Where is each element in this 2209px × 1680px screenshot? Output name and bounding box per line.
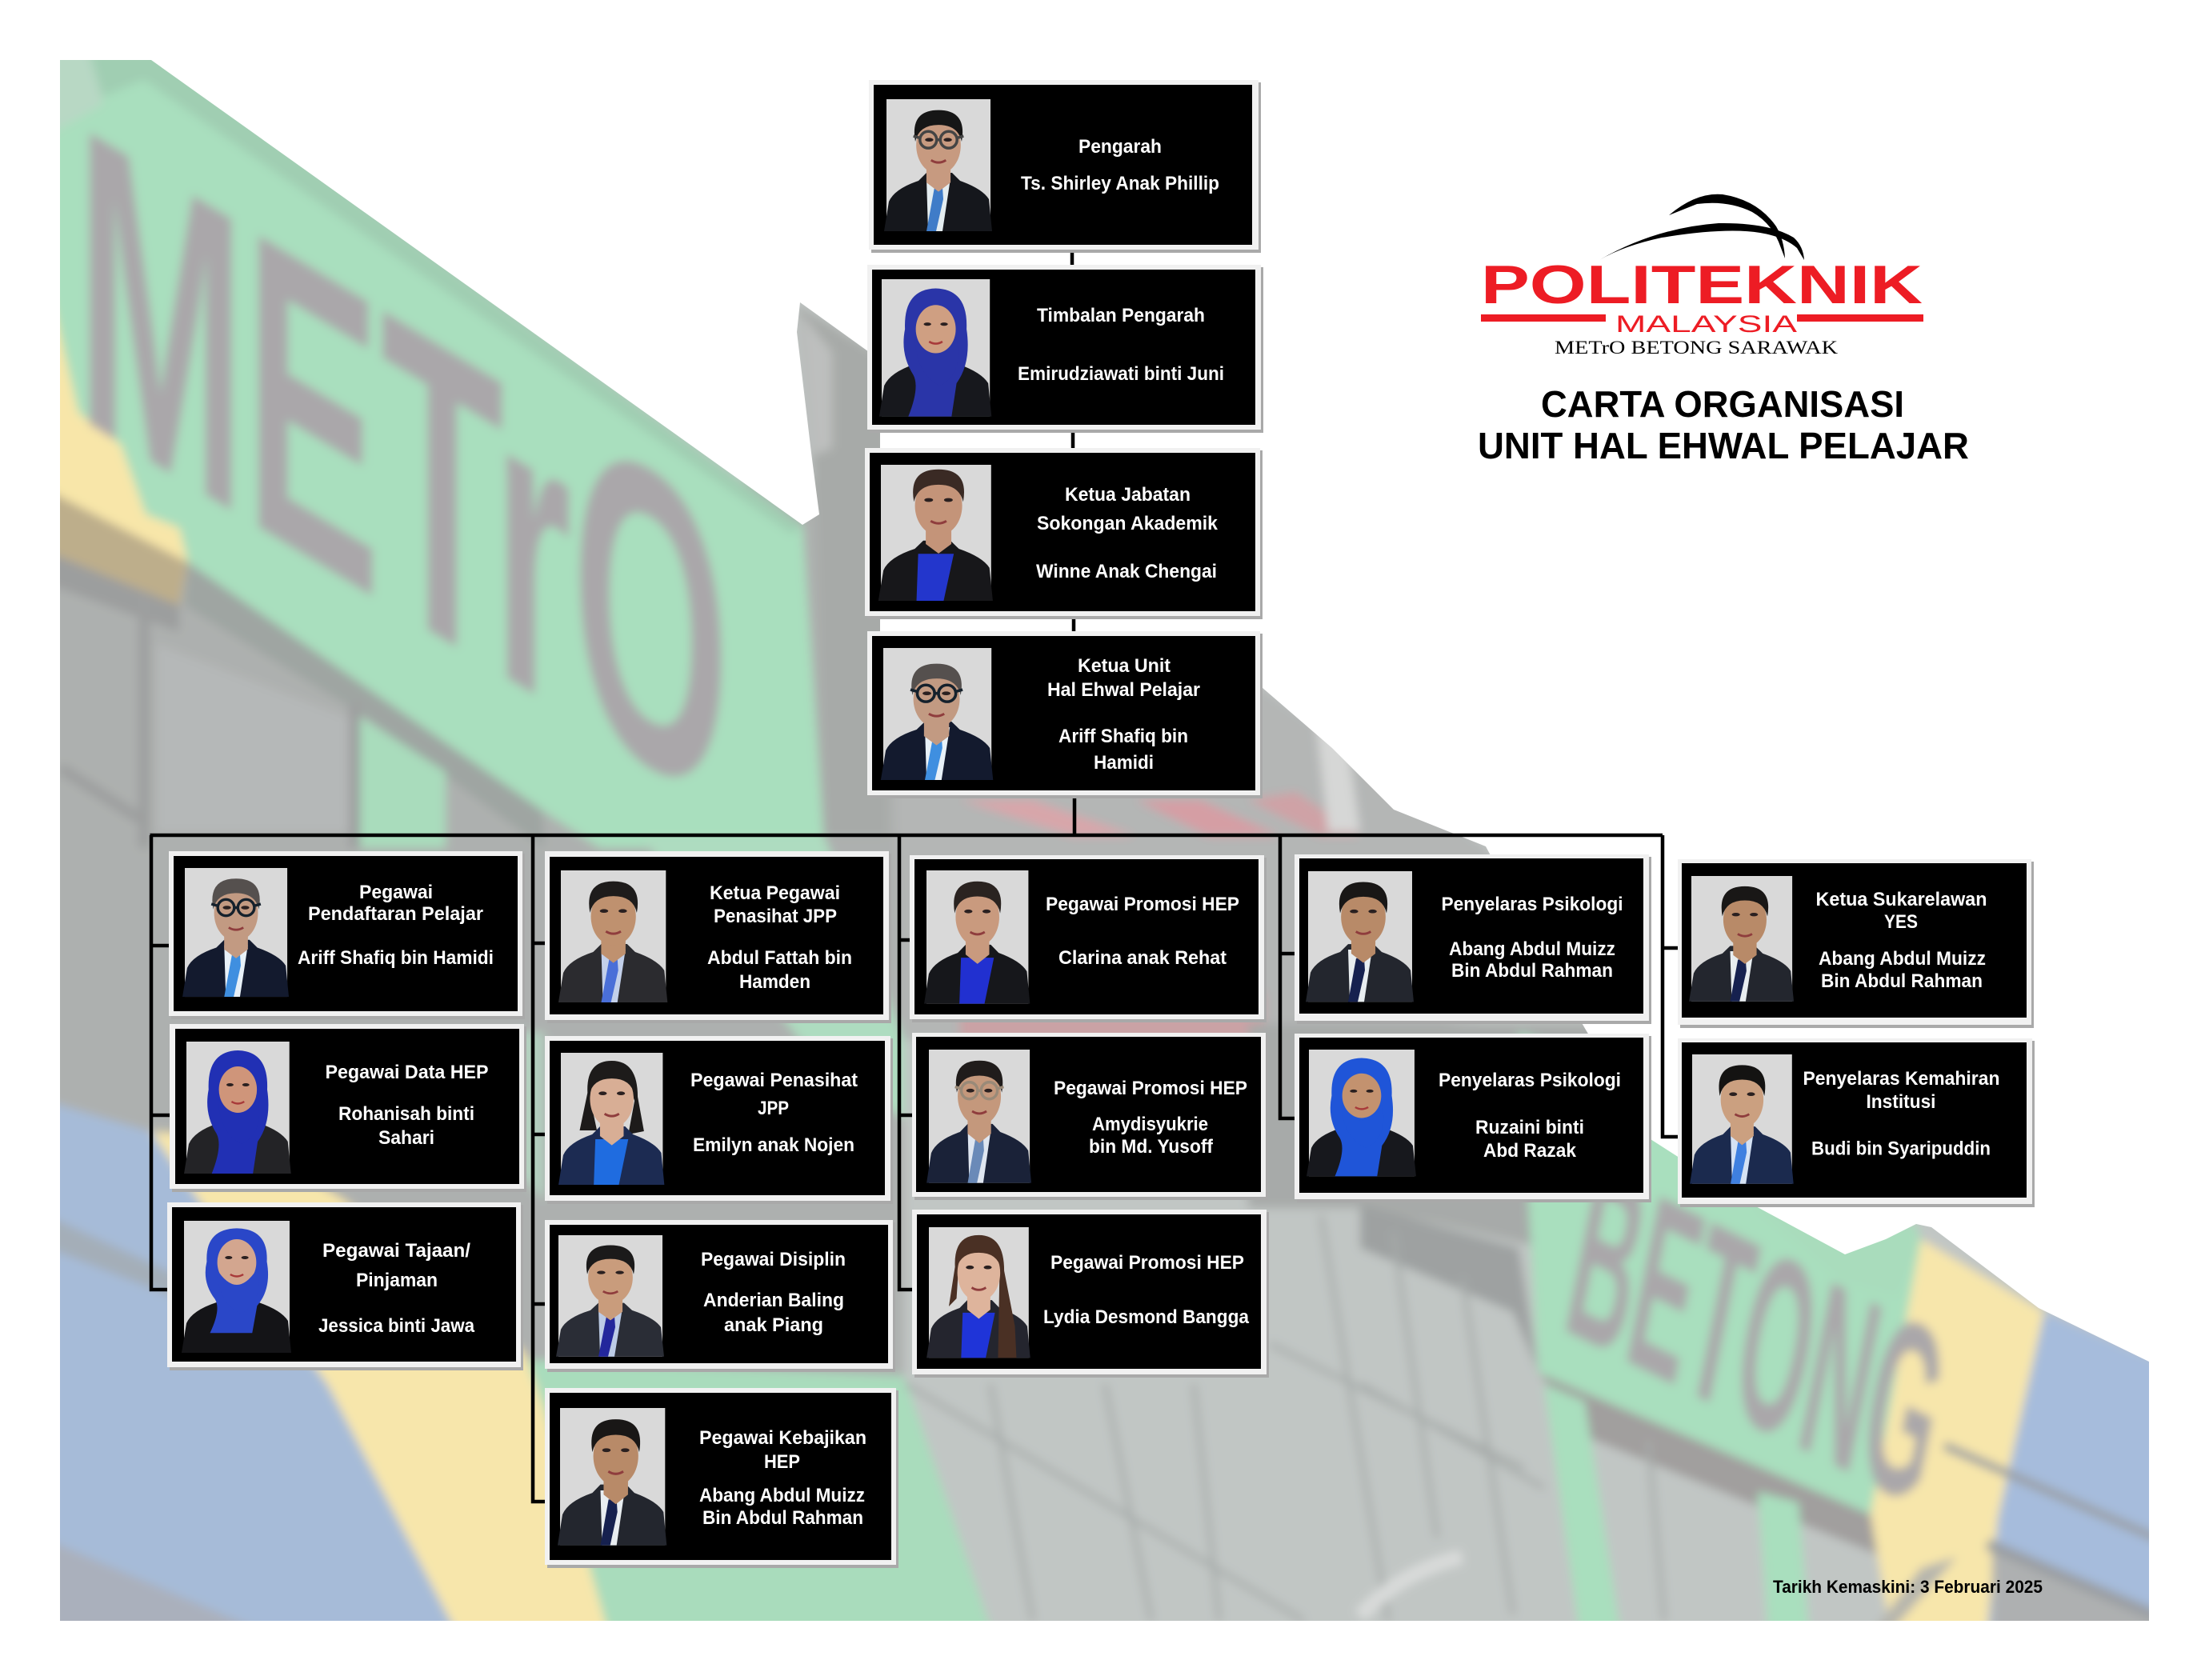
card: Pengarah (869, 80, 1261, 253)
text: Ketua Unit (1078, 655, 1171, 677)
card: Pegawai Kebajikan HEP (545, 1388, 898, 1568)
text: Ts. Shirley Anak Phillip (1021, 173, 1219, 194)
portrait: Ariff (182, 868, 289, 997)
title (1478, 383, 1969, 466)
text (1816, 889, 1987, 992)
text (1043, 1252, 1250, 1328)
logo bars (1481, 314, 1923, 322)
text (1803, 1068, 2000, 1160)
text: Sokongan Akademik (1037, 513, 1219, 534)
portrait: Abang Abdul Muizz (1689, 876, 1794, 1002)
portrait: Clarina (924, 870, 1030, 1004)
text: Jessica binti Jawa (318, 1315, 475, 1337)
text: Pegawai Promosi HEP (1054, 1078, 1247, 1099)
card: Timbalan Pengarah (867, 265, 1263, 433)
text: Emirudziawati binti Juni (1018, 363, 1224, 385)
text (1054, 1078, 1247, 1158)
text: Pegawai (359, 882, 433, 903)
text (1439, 1070, 1621, 1162)
portrait: Ruzaini (1307, 1050, 1416, 1176)
card: Penyelaras Kemahiran Institusi (1678, 1038, 2035, 1207)
text (1036, 484, 1219, 582)
background photo: building facade: METrO (76, 33, 730, 903)
card: Ketua Jabatan (865, 448, 1263, 619)
text: Ketua Pegawai (710, 882, 840, 904)
text (1046, 894, 1239, 969)
text: Ketua Jabatan (1065, 484, 1191, 506)
text: Timbalan Pengarah (1037, 305, 1205, 326)
card: Pegawai Promosi HEP (Lydia) (912, 1210, 1269, 1378)
text: Winne Anak Chengai (1036, 561, 1217, 582)
update date: Tarikh Kemaskini: 3 Februari 2025 (1773, 1577, 2043, 1597)
text (701, 1249, 846, 1336)
portrait: Emilyn (558, 1053, 664, 1185)
text: Bin Abdul Rahman (702, 1507, 863, 1529)
text: Clarina anak Rehat (1058, 947, 1227, 969)
text (1047, 655, 1200, 774)
text (298, 882, 494, 969)
title: CARTA ORGANISASI (1541, 383, 1904, 425)
card: Penyelaras Psikologi (Abang) (1295, 854, 1651, 1024)
logo campus name: METrO BETONG SARAWAK (1555, 338, 1838, 358)
text: Ariff Shafiq bin (1058, 726, 1188, 747)
title: UNIT HAL EHWAL PELAJAR (1478, 425, 1969, 466)
logo subtitle: MALAYSIA (1615, 311, 1797, 338)
card: Pegawai Penasihat JPP (545, 1036, 893, 1204)
card: Ketua Unit (867, 631, 1263, 798)
text: Penasihat JPP (714, 906, 837, 927)
text: YES (1884, 911, 1918, 933)
portrait: Shirley (884, 99, 992, 231)
text: HEP (764, 1451, 800, 1473)
text (690, 1070, 858, 1156)
text: Pegawai Promosi HEP (1046, 894, 1239, 915)
text: Ruzaini binti (1475, 1117, 1584, 1138)
text: Pegawai Disiplin (701, 1249, 846, 1270)
portrait: Abang Abdul Muizz (558, 1408, 666, 1546)
portrait: Abdul Fattah (558, 870, 667, 1002)
text: anak Piang (724, 1314, 823, 1336)
card: Ketua Pegawai Penasihat JPP (545, 851, 891, 1023)
text (707, 882, 852, 993)
text: Penyelaras Psikologi (1439, 1070, 1621, 1091)
text: Ketua Sukarelawan (1816, 889, 1987, 910)
portrait: Lydia (926, 1227, 1030, 1358)
text (1018, 305, 1224, 385)
logo: Politeknik Malaysia (1481, 194, 1923, 358)
text: Hamden (739, 971, 810, 993)
text: Bin Abdul Rahman (1451, 960, 1613, 982)
card: Pegawai Tajaan / Pinjaman (167, 1202, 523, 1370)
text: bin Md. Yusoff (1089, 1136, 1214, 1158)
text (325, 1062, 488, 1149)
text: Hamidi (1094, 752, 1154, 774)
portrait: Winne (878, 465, 993, 601)
text: Bin Abdul Rahman (1821, 970, 1983, 992)
card: Pegawai Pendaftaran Pelajar (169, 851, 525, 1019)
text: Budi bin Syaripuddin (1811, 1138, 1991, 1160)
text: Penyelaras Psikologi (1442, 894, 1623, 915)
text: Anderian Baling (703, 1290, 844, 1311)
text: Pegawai Data HEP (325, 1062, 488, 1083)
card: Penyelaras Psikologi (Ruzaini) (1295, 1034, 1651, 1202)
text (699, 1427, 866, 1529)
text: Pinjaman (356, 1270, 438, 1291)
text: Abang Abdul Muizz (699, 1485, 865, 1506)
text: Abd Razak (1483, 1140, 1577, 1162)
text: Abang Abdul Muizz (1449, 938, 1615, 960)
text: Sahari (378, 1127, 434, 1149)
text (1442, 894, 1623, 982)
card: Pegawai Promosi HEP (Amydisyukrie) (912, 1033, 1268, 1200)
text: Pengarah (1078, 136, 1162, 158)
text: Rohanisah binti (338, 1103, 474, 1125)
text: Emilyn anak Nojen (693, 1134, 854, 1156)
portrait: Jessica (182, 1221, 291, 1353)
card: Pegawai Data HEP (170, 1024, 526, 1192)
text (318, 1240, 475, 1337)
text: Pegawai Promosi HEP (1050, 1252, 1244, 1274)
text: Lydia Desmond Bangga (1043, 1306, 1250, 1328)
portrait: Anderian (556, 1235, 664, 1357)
portrait: Rohanisah (184, 1042, 291, 1174)
text: Ariff Shafiq bin Hamidi (298, 947, 494, 969)
text: Pendaftaran Pelajar (308, 903, 483, 925)
card: Pegawai Disiplin (545, 1220, 895, 1372)
text: Amydisyukrie (1092, 1114, 1208, 1135)
logo wordmark: POLITEKNIK (1481, 254, 1923, 315)
text: JPP (758, 1098, 789, 1119)
portrait: Emirudziawati (879, 279, 991, 417)
text: Hal Ehwal Pelajar (1047, 679, 1200, 701)
text: Institusi (1866, 1091, 1936, 1113)
text: Penyelaras Kemahiran (1803, 1068, 2000, 1090)
text (1021, 136, 1219, 194)
text: Abang Abdul Muizz (1819, 948, 1986, 970)
logo swoosh (1599, 194, 1804, 260)
text: Pegawai Kebajikan (699, 1427, 866, 1449)
portrait: Budi (1690, 1054, 1794, 1184)
text: Abdul Fattah bin (707, 947, 852, 969)
text: Pegawai Penasihat (690, 1070, 858, 1091)
connector lines (150, 250, 1678, 1502)
card: Ketua Sukarelawan YES (1678, 859, 2034, 1028)
portrait: Ariff (881, 648, 993, 780)
portrait: Abang Abdul Muizz (1306, 871, 1414, 1002)
portrait: Amydisyukrie (926, 1050, 1031, 1183)
text: Pegawai Tajaan/ (322, 1240, 470, 1262)
card: Pegawai Promosi HEP (Clarina) (910, 855, 1267, 1022)
